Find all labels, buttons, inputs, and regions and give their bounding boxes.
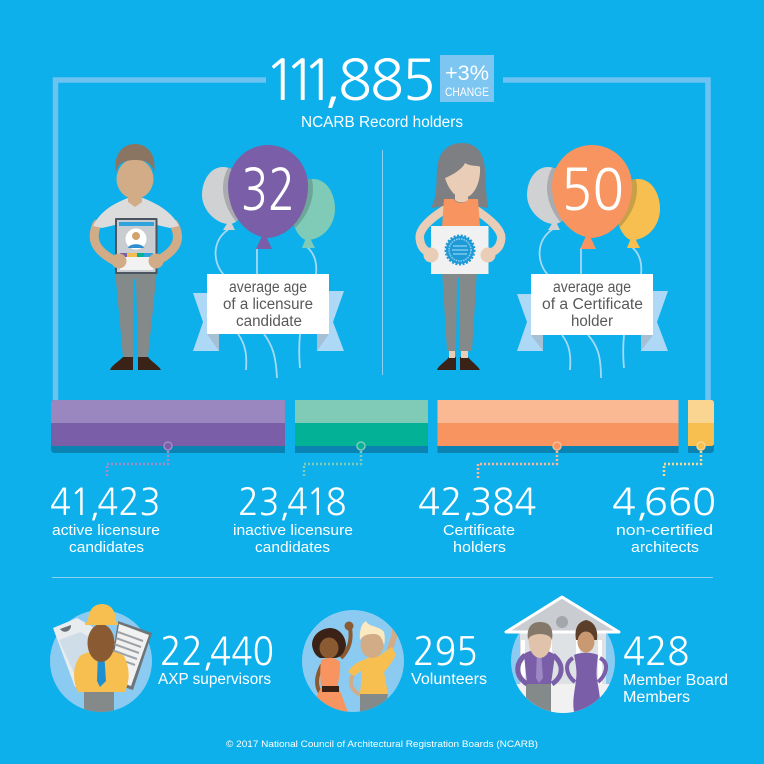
trousers [115,270,157,357]
stat: Certificate holders [418,484,537,556]
certificate sign [431,226,488,274]
purple balloon [228,145,308,249]
yellow balloon [618,179,660,248]
strings [216,229,316,378]
stat: non-certified architects: architects [631,539,699,556]
stat: active licensure candidates: active licensure [52,522,160,539]
grey balloon [527,167,562,230]
connector: inactive licensure candidates [304,442,365,478]
ankles [449,349,468,358]
tie [97,651,106,687]
title [264,53,494,131]
frame [56,80,708,400]
segment: non-certified architects [688,400,714,453]
grey balloon [202,167,238,230]
teal balloon [294,179,335,248]
segment: Certificate holders [438,400,678,453]
head [455,190,468,202]
ribbon: licensure candidate age [193,274,344,351]
shoes [110,357,161,370]
hands [112,254,126,268]
icon: Member Board Members [506,597,619,718]
icon: volunteers [302,610,404,716]
stat: Member Board Members: Members [623,689,690,706]
label text: candidate [236,313,302,330]
connector: non-certified architects [664,442,705,478]
hard hat [85,604,118,625]
label text: of a licensure [223,296,313,313]
subtitle: NCARB Record holders [301,114,463,131]
label text: average age [229,279,307,296]
stat: AXP supervisors: AXP supervisors [158,671,271,688]
body [74,650,129,692]
stat: AXP supervisors: 22,440 [160,632,274,671]
head [88,624,114,662]
stacked bar [51,400,714,453]
icon: AXP supervisor [50,604,152,712]
change badge: +3% [445,62,489,85]
trousers [84,690,114,712]
tablet [115,218,158,274]
stat: Member Board Members [623,633,728,706]
stat: Member Board Members: 428 [623,633,689,671]
stat: non-certified architects: non-certified [616,522,713,539]
shoes [437,357,480,370]
balloons: age 50 [527,145,660,378]
stat: inactive licensure candidates: 23,418 [238,485,347,521]
segment: inactive licensure candidates [295,400,428,453]
blueprint [53,618,116,687]
strings [540,229,641,378]
age number: 32 [241,162,295,219]
label text: of a Certificate [542,296,643,313]
age number: 50 [561,162,624,219]
stat: Certificate holders: Certificate [443,522,515,539]
stat: active licensure candidates: 41,423 [50,484,161,521]
total count: 111,885 [264,53,436,109]
ribbon ends [193,291,344,351]
footer: © 2017 National Council of Architectural Registration Boards (NCARB) [226,739,538,750]
stat: inactive licensure candidates: candidates [255,539,330,556]
segment: active licensure candidates [51,400,285,453]
orange balloon [552,145,632,249]
label box [531,274,653,335]
label text: average age [553,279,631,296]
stat: Volunteers: 295 [413,633,478,671]
connector: active licensure candidates [107,442,172,478]
label box [207,274,329,334]
stat: active licensure candidates: candidates [69,539,144,556]
vertical divider [382,150,384,375]
stat: non-certified architects [612,483,716,556]
stat: Volunteers: Volunteers [411,671,487,688]
stat: Member Board Members: Member Board [623,672,728,689]
section divider [52,576,713,578]
change badge [440,55,494,102]
arms [420,210,501,254]
trousers [442,270,477,351]
label text: holder [571,313,613,330]
shirt [93,198,179,240]
man [348,621,398,712]
head [128,192,142,207]
woman [567,620,606,712]
balloons: age 32 [202,145,335,378]
stat: Certificate holders: 42,384 [418,484,537,521]
figure: licensure candidate [93,144,179,370]
label text [542,279,643,330]
change badge: CHANGE [445,87,489,99]
woman [310,622,354,712]
hair [115,144,155,173]
man [518,622,561,718]
hands [424,248,438,262]
label text [223,279,313,330]
connector: Certificate holders [478,442,561,478]
top [442,199,480,227]
stat: non-certified architects: 4,660 [612,483,716,521]
building [506,597,619,716]
stat: active licensure candidates [50,484,161,556]
ribbon: Certificate holder age [517,274,668,351]
figure: Certificate holder [420,143,501,370]
ribbon ends [517,291,668,351]
clipboard [108,621,152,690]
stat: inactive licensure candidates: inactive licensure [233,522,353,539]
hair [431,143,488,208]
stat: inactive licensure candidates [233,485,353,556]
stat: AXP supervisors [158,632,274,688]
arms [94,224,178,262]
stat: Volunteers [411,633,487,688]
stat: Certificate holders: holders [453,539,506,556]
